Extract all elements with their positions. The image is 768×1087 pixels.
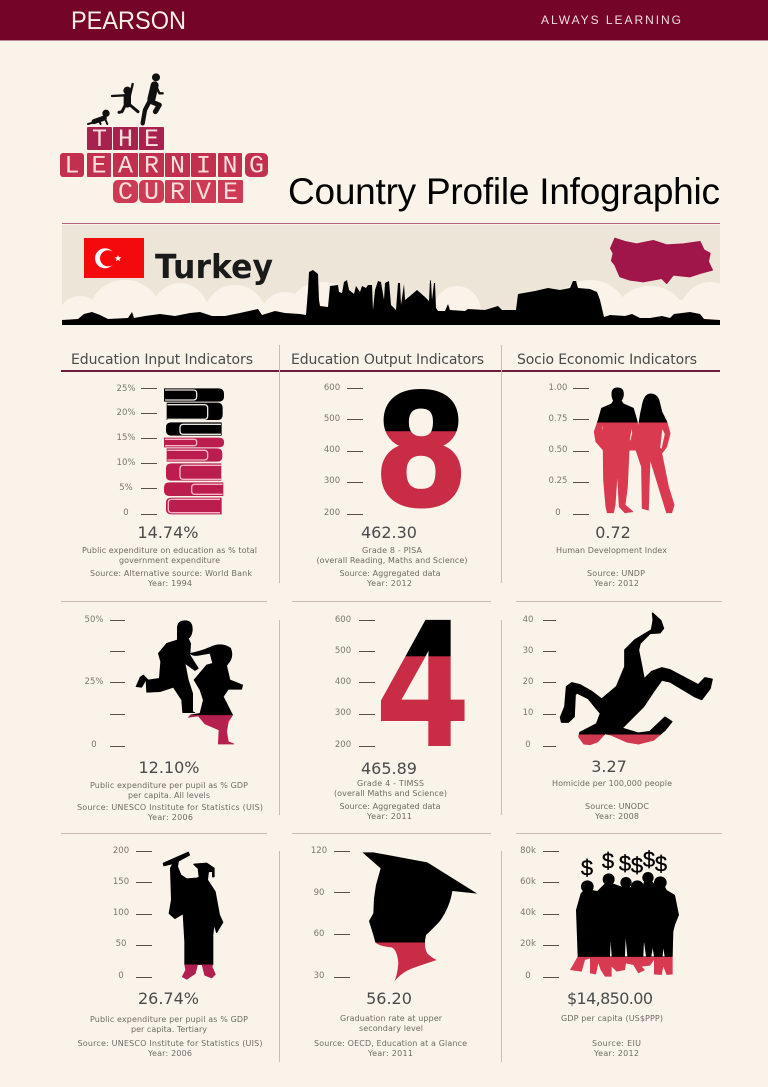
scale: 0 — [118, 971, 124, 981]
logo letter tiles: A — [118, 152, 133, 180]
icon: head with mortarboard — [362, 852, 477, 982]
scale: 1.00 — [549, 383, 567, 393]
icon: dollar signs: $ — [602, 848, 614, 874]
description: Public expenditure per pupil as % GDP — [90, 781, 248, 790]
header bar: PEARSON — [71, 7, 186, 35]
source — [78, 1039, 262, 1058]
panel: Human Development Index — [549, 383, 674, 588]
scale: 600 — [324, 383, 340, 393]
icon: numeral 4: 4 — [380, 584, 464, 783]
description — [334, 779, 447, 798]
scale: 0 — [91, 740, 97, 750]
icon: dollar signs: $ — [643, 847, 655, 872]
section headings: Education Output Indicators — [291, 352, 484, 368]
icon: dollar signs: $ — [631, 853, 643, 878]
scale: 0.25 — [549, 476, 567, 486]
value: 12.10% — [138, 758, 200, 777]
logo letter tiles: T — [92, 125, 107, 154]
scale: 30 — [523, 646, 533, 656]
scale: 0 — [525, 740, 531, 750]
scale — [85, 615, 125, 750]
description: secondary level — [359, 1024, 423, 1033]
source: Source: OECD, Education at a Glance — [314, 1039, 467, 1048]
source — [592, 1039, 641, 1058]
panel: GDP per capita — [520, 846, 679, 1058]
source: Source: Aggregated data — [340, 569, 441, 578]
header bar — [0, 0, 768, 40]
header bar: ALWAYS LEARNING — [541, 13, 681, 27]
scale: 120 — [311, 846, 327, 856]
icon: man and woman silhouettes — [594, 388, 674, 513]
panel: expenditure per pupil, all levels — [77, 615, 263, 822]
source: Source: UNESCO Institute for Statistics (UIS) — [77, 803, 263, 812]
source — [340, 802, 441, 821]
source: Year: 1994 — [147, 579, 192, 588]
description: Public expenditure per pupil as % GDP — [90, 1015, 248, 1024]
description: Grade 8 - PISA — [362, 546, 423, 555]
scale — [335, 615, 375, 750]
source: Year: 2011 — [367, 1049, 413, 1058]
description — [340, 1014, 443, 1033]
source — [587, 569, 645, 588]
scale: 90 — [314, 888, 324, 898]
scale: 0.75 — [549, 414, 567, 424]
scale: 20 — [523, 677, 533, 687]
source: Year: 2008 — [594, 812, 639, 821]
scale: 200 — [324, 508, 340, 518]
scale: 60 — [314, 929, 324, 939]
scale: 400 — [324, 445, 340, 455]
scale: 50% — [85, 615, 103, 625]
scale: 80k — [520, 846, 536, 856]
scale: 20k — [520, 939, 536, 949]
source — [314, 1039, 467, 1058]
icon: baby, child and adult silhouettes — [88, 73, 163, 124]
scale: 0 — [123, 508, 129, 518]
scale: 10 — [523, 708, 533, 718]
source: Year: 2012 — [593, 579, 639, 588]
description: (overall Reading, Maths and Science) — [316, 556, 468, 565]
source — [77, 803, 263, 822]
scale — [523, 615, 556, 750]
logo letter tiles — [60, 125, 268, 207]
logo letter tiles: C — [118, 178, 133, 207]
icon: Turkish flag — [84, 238, 144, 278]
panel: Grade 4 TIMSS — [334, 584, 464, 821]
logo letter tiles: G — [249, 152, 264, 180]
source: Source: Alternative source: World Bank — [90, 569, 252, 578]
section headings — [61, 352, 720, 371]
scale: 200 — [113, 846, 129, 856]
logo letter tiles: I — [196, 152, 211, 180]
source: Source: UNDP — [587, 569, 645, 578]
scale — [549, 383, 589, 518]
scale: 100 — [113, 908, 129, 918]
description: Grade 4 - TIMSS — [357, 779, 424, 788]
value: 14.74% — [137, 523, 199, 542]
scale: 0 — [525, 971, 531, 981]
logo letter tiles: N — [170, 152, 185, 180]
panel: graduation rate — [311, 846, 477, 1058]
scale — [117, 384, 157, 518]
icon: stack of books — [164, 388, 224, 514]
source: Year: 2012 — [366, 579, 412, 588]
logo letter tiles: E — [223, 178, 238, 207]
source: Year: 2006 — [147, 1049, 192, 1058]
logo letter tiles: H — [118, 125, 133, 154]
logo letter tiles: E — [91, 152, 107, 180]
scale: 300 — [335, 708, 351, 718]
description: Graduation rate at upper — [340, 1014, 443, 1023]
scale: 150 — [113, 877, 129, 887]
source: Source: EIU — [592, 1039, 641, 1048]
scale: 20% — [117, 408, 135, 418]
description: Public expenditure on education as % total — [82, 546, 257, 555]
value: 465.89 — [361, 759, 417, 778]
description — [90, 1015, 248, 1034]
panel: expenditure per pupil, tertiary — [78, 846, 262, 1058]
scale: 400 — [335, 677, 351, 687]
scale: 500 — [335, 646, 351, 656]
description — [316, 546, 468, 565]
scale: 300 — [324, 476, 340, 486]
description: per capita. Tertiary — [131, 1025, 207, 1034]
scale — [324, 383, 363, 518]
icon: graduate with diploma — [163, 852, 223, 979]
logo letter tiles: L — [64, 152, 80, 180]
value: 0.72 — [595, 523, 631, 542]
source: Source: UNESCO Institute for Statistics (UIS) — [78, 1039, 262, 1048]
description — [82, 546, 257, 565]
scale — [311, 846, 350, 981]
scale: 25% — [117, 384, 135, 394]
icon: group of people — [570, 872, 679, 977]
logo letter tiles: R — [144, 152, 159, 180]
icon: map of Turkey — [611, 238, 712, 283]
value: 26.74% — [138, 989, 199, 1008]
source — [585, 802, 649, 821]
description: (overall Maths and Science) — [334, 789, 447, 798]
description: per capita. All levels — [128, 791, 210, 800]
icon: running children — [136, 621, 243, 744]
panel: public expenditure on education — [82, 384, 257, 588]
source: Year: 2011 — [366, 812, 412, 821]
scale: 500 — [324, 414, 340, 424]
icon: dollar signs: $ — [581, 856, 593, 880]
scale: 25% — [85, 677, 103, 687]
scale: 200 — [335, 740, 351, 750]
scale: 50 — [116, 939, 126, 949]
scale: 10% — [117, 458, 135, 468]
value: 56.20 — [366, 989, 412, 1008]
scale: 30 — [314, 971, 324, 981]
panel: Grade 8 PISA — [316, 357, 468, 588]
description: Homicide per 100,000 people — [552, 779, 672, 788]
country name: Turkey — [155, 247, 273, 286]
icon: skyline — [62, 270, 720, 325]
scale — [520, 846, 559, 981]
logo letter tiles: E — [144, 125, 159, 154]
description — [90, 781, 248, 800]
icon: falling figure — [561, 613, 712, 744]
scale: 40k — [520, 908, 536, 918]
source: Source: UNODC — [585, 802, 649, 811]
description: GDP per capita (US$PPP) — [561, 1014, 663, 1023]
value: $14,850.00 — [567, 989, 653, 1008]
description: government expenditure — [119, 556, 220, 565]
scale — [113, 846, 152, 981]
scale: 600 — [335, 615, 351, 625]
description: Human Development Index — [556, 546, 667, 555]
banner: Turkey — [62, 223, 720, 325]
scale: 0 — [555, 508, 561, 518]
scale: 60k — [520, 877, 536, 887]
section headings: Socio Economic Indicators — [517, 352, 697, 368]
icon: dollar signs — [581, 847, 667, 880]
logo letter tiles: U — [144, 178, 159, 207]
logo letter tiles: V — [196, 178, 211, 207]
scale: 0.50 — [549, 445, 567, 455]
logo letter tiles: N — [222, 152, 238, 180]
icon: dollar signs: $ — [619, 851, 631, 876]
source — [340, 569, 441, 588]
value: 462.30 — [361, 523, 417, 542]
scale: 40 — [523, 615, 533, 625]
logo: The Learning Curve — [60, 73, 268, 207]
title: Country Profile Infographic — [288, 171, 720, 212]
source: Source: Aggregated data — [340, 802, 441, 811]
clouds — [62, 280, 720, 320]
source: Year: 2012 — [593, 1049, 639, 1058]
icon: dollar signs: $ — [655, 852, 667, 876]
icon: numeral 8: 8 — [378, 357, 464, 540]
panel: homicide — [523, 613, 712, 821]
section headings: Education Input Indicators — [71, 352, 253, 368]
scale: 5% — [119, 483, 133, 493]
logo letter tiles: R — [170, 178, 185, 207]
scale: 15% — [117, 433, 135, 443]
source — [90, 569, 252, 588]
value: 3.27 — [591, 757, 627, 776]
source: Year: 2006 — [147, 813, 193, 822]
